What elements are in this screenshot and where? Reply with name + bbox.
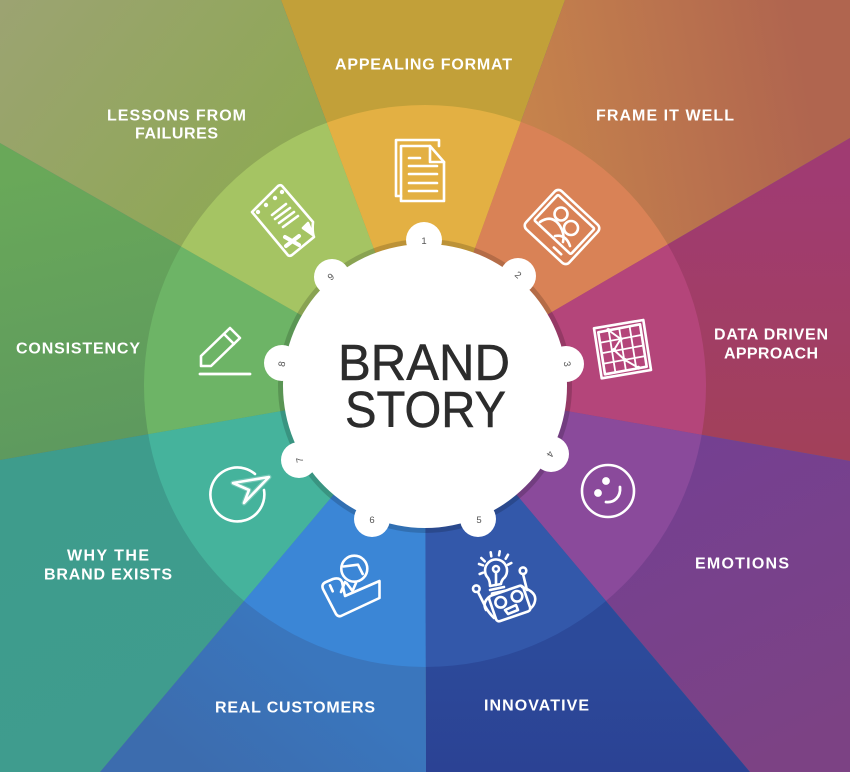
dark ring around center [278, 239, 572, 533]
label: lessons from failures: FAILURES [135, 126, 218, 142]
step numbers [277, 236, 572, 526]
step numbers: 7 [295, 456, 306, 463]
label: why the brand exists: WHY THE [67, 548, 149, 564]
label: why the brand exists: BRAND EXISTS [44, 566, 172, 584]
step numbers: 1 [421, 236, 427, 247]
icon: data grid [594, 320, 651, 378]
step numbers: 6 [369, 515, 375, 526]
label: real customers: REAL CUSTOMERS [215, 700, 375, 716]
step numbers: 4 [543, 449, 556, 459]
label: data driven approach: APPROACH [724, 346, 818, 362]
center circle with numbered tabs [264, 222, 584, 537]
step numbers: 8 [277, 361, 288, 368]
icon: documents [396, 140, 444, 201]
icon: paper plane in circle [210, 467, 269, 521]
step numbers: 9 [326, 271, 337, 283]
label: consistency: CONSISTENCY [16, 340, 140, 358]
icon: robot with light bulb [473, 551, 535, 622]
label: data driven approach [714, 326, 828, 362]
icon: customer [322, 556, 380, 616]
step numbers: 2 [512, 269, 523, 281]
inner lighter ring [144, 105, 706, 667]
icon: pencil and line [200, 328, 250, 374]
title [338, 334, 510, 438]
label: innovative: INNOVATIVE [484, 698, 589, 714]
label: data driven approach: DATA DRIVEN [714, 326, 828, 344]
label: appealing format: APPEALING FORMAT [335, 56, 512, 74]
label: why the brand exists [44, 548, 172, 584]
icon: tablet with people [523, 188, 601, 266]
title: STORY [345, 381, 506, 438]
icon: smiley [582, 465, 634, 517]
step numbers: 5 [476, 515, 482, 526]
label: lessons from failures [107, 108, 246, 142]
title: BRAND [338, 334, 510, 391]
icon: failed note [252, 185, 314, 256]
label: frame it well: FRAME IT WELL [596, 108, 734, 124]
label: lessons from failures: LESSONS FROM [107, 108, 246, 124]
label: emotions: EMOTIONS [695, 556, 789, 572]
step numbers: 3 [561, 361, 572, 368]
